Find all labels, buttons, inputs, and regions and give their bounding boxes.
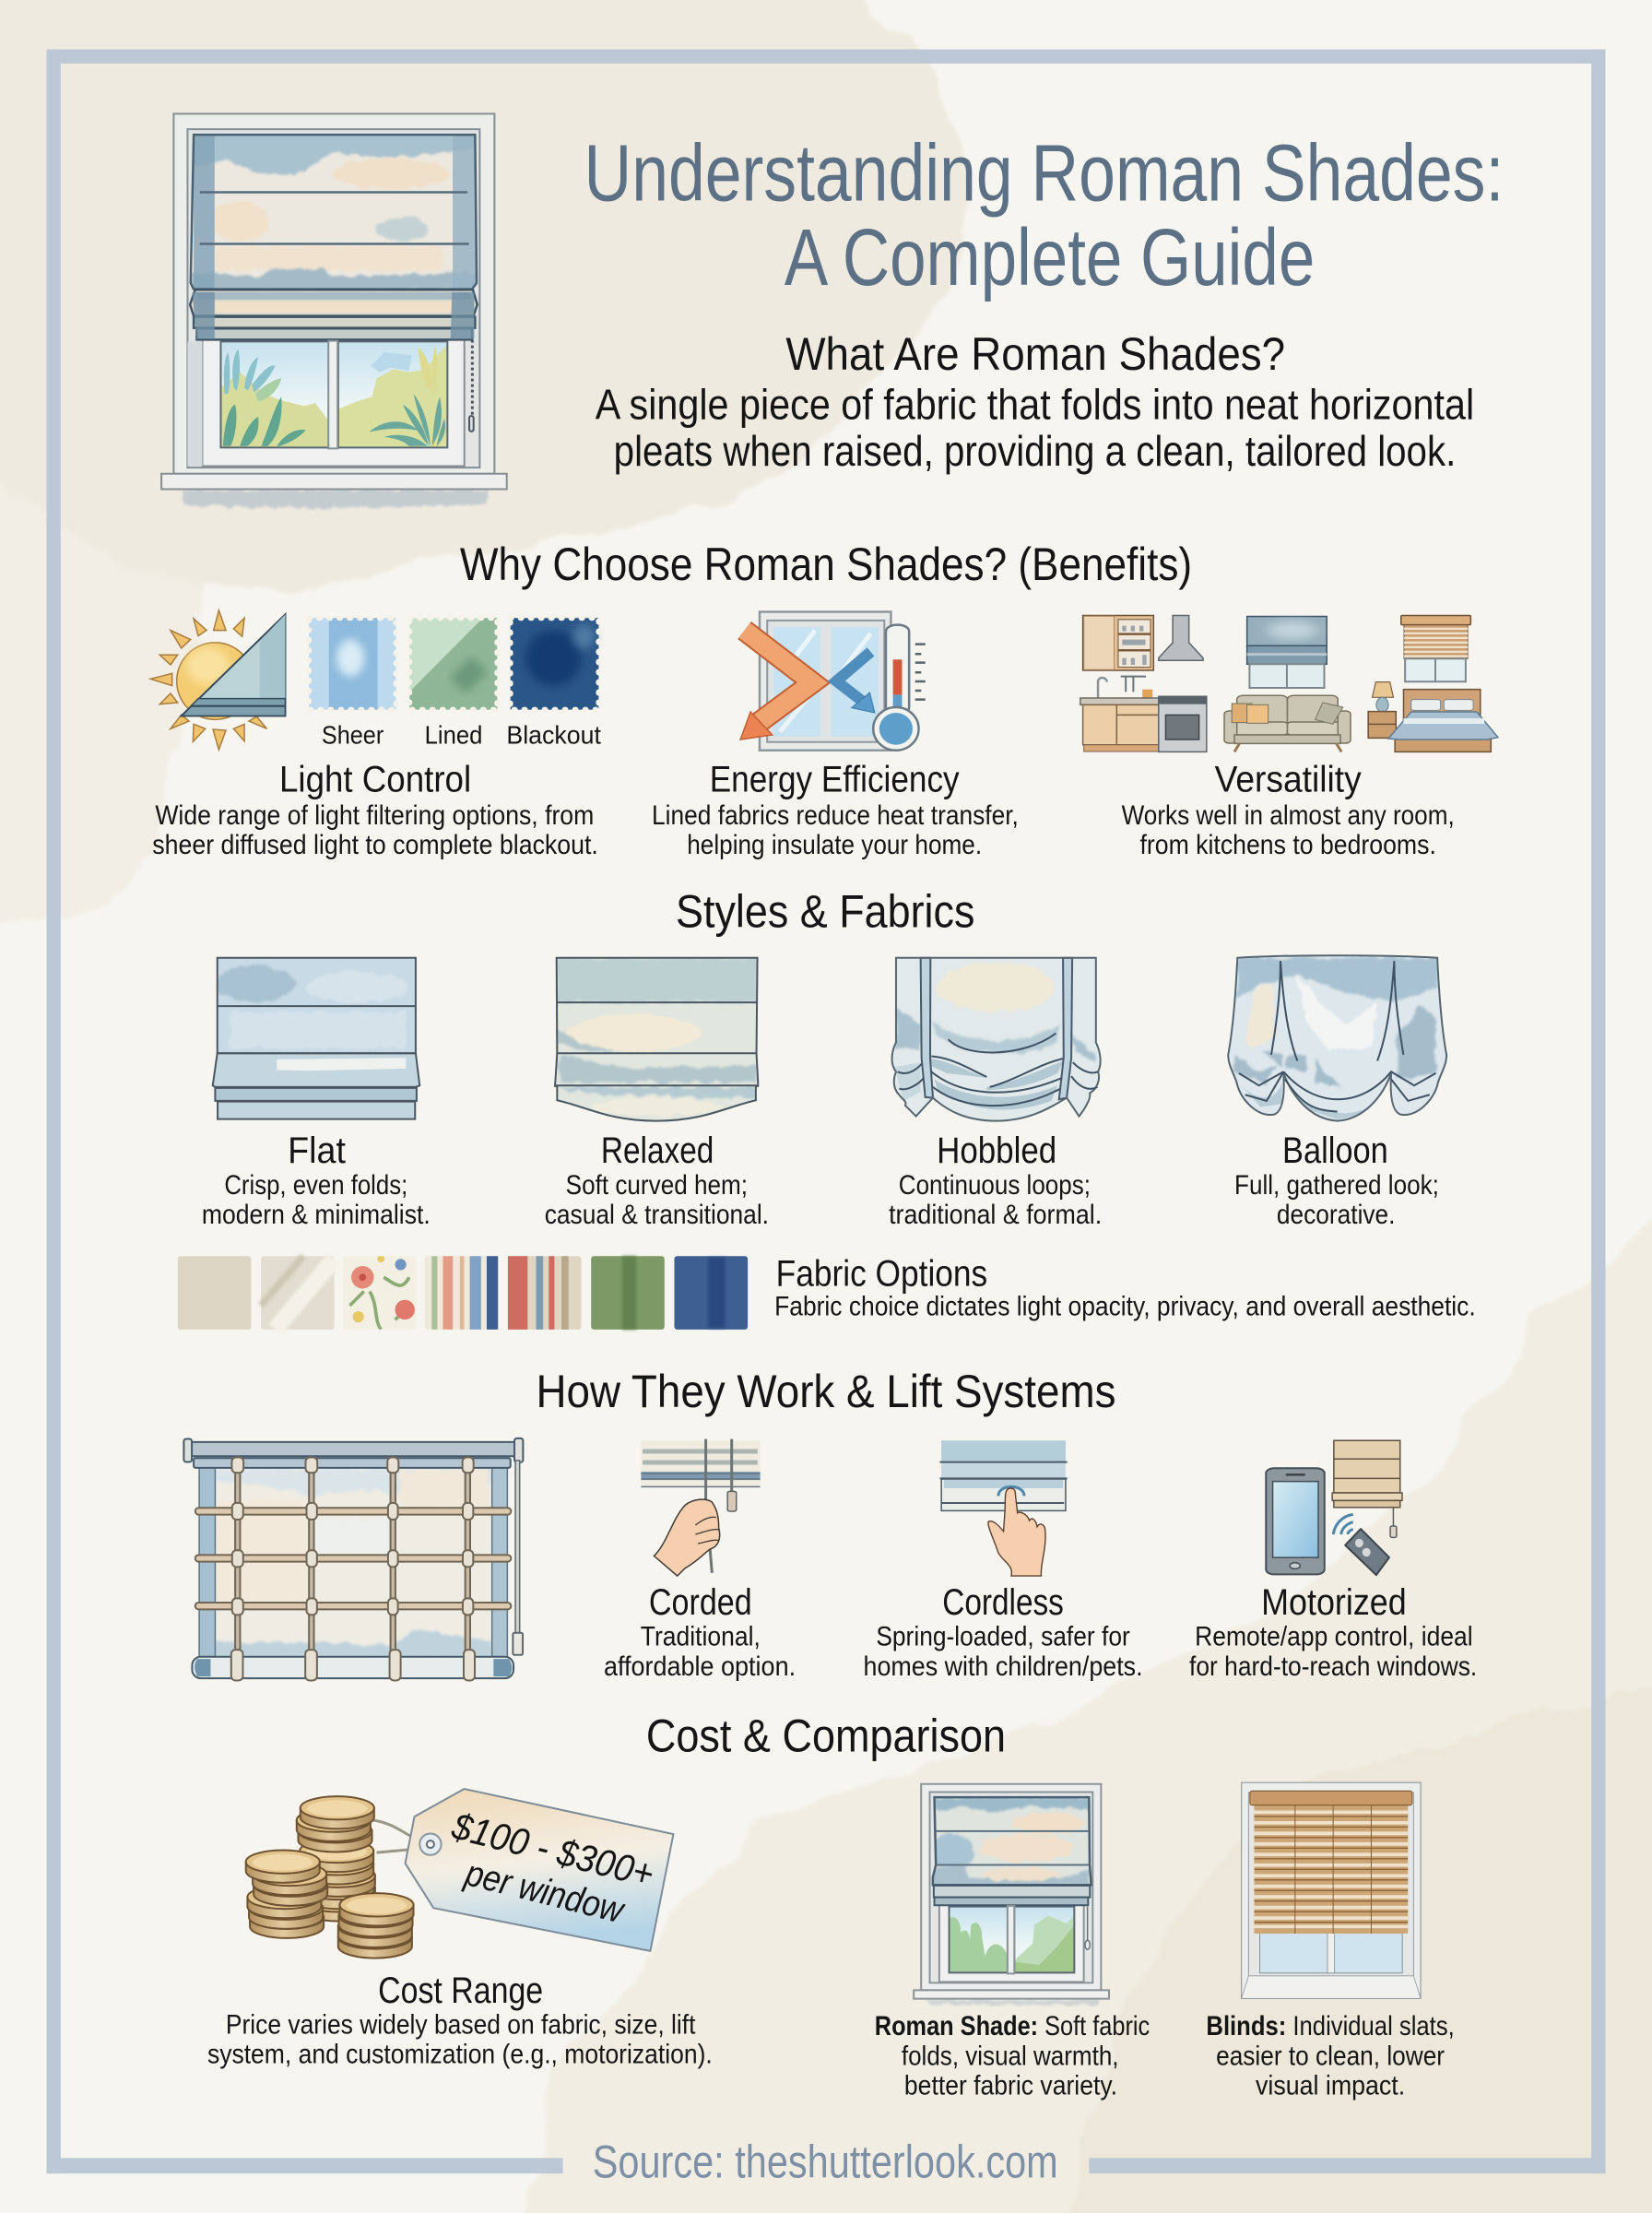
panel: hobbled style — [889, 956, 1105, 1230]
panel: energy efficiency: Energy Efficiency — [710, 760, 960, 800]
swatch: linen — [178, 1256, 251, 1330]
icon: sun with shade — [150, 610, 285, 750]
panel: relaxed style — [545, 956, 769, 1230]
icon: front coin stack — [338, 1893, 414, 1959]
room icons — [1080, 616, 1498, 751]
swatch: blackout — [511, 618, 598, 710]
swatch: natural weave — [261, 1256, 335, 1330]
panel: cost range: system, and customization (e.g., motorization). — [207, 2040, 713, 2070]
panel: relaxed style: Relaxed — [601, 1130, 714, 1171]
panel: roman shade comparison: folds, visual warmth, — [902, 2041, 1119, 2071]
pull chain — [471, 340, 474, 421]
panel: corded — [604, 1439, 796, 1682]
panel: relaxed style: casual & transitional. — [545, 1200, 769, 1230]
section heading: lift systems: How They Work & Lift Systems — [537, 1365, 1115, 1417]
panel: flat style: modern & minimalist. — [202, 1200, 431, 1230]
view through right pane — [338, 341, 447, 447]
panel: blinds comparison: Blinds: Individual slats, — [1206, 2011, 1455, 2041]
panel: energy efficiency — [652, 612, 1019, 860]
shade pleats — [190, 290, 478, 316]
panel: balloon style: Full, gathered look; — [1234, 1170, 1439, 1201]
fabric options text: Fabric Options — [776, 1253, 987, 1294]
lift cords — [235, 1461, 470, 1675]
price tag text: per window — [461, 1852, 629, 1932]
title: A Complete Guide — [785, 213, 1315, 302]
panel: cost range: Cost Range — [378, 1970, 543, 2011]
view through right pane — [1014, 1907, 1074, 1972]
panel: cost range: Price varies widely based on fabric, size, lift — [226, 2010, 696, 2041]
tag string — [373, 1820, 428, 1852]
panel: balloon style: decorative. — [1277, 1200, 1395, 1230]
panel: flat style: Flat — [288, 1130, 346, 1171]
window sill — [161, 474, 507, 489]
swatch labels: Blackout — [506, 721, 601, 750]
shade: flat — [213, 956, 419, 1119]
fabric shade — [190, 132, 479, 339]
intro text: pleats when raised, providing a clean, tailored look. — [614, 427, 1456, 475]
price tag text: $100 - $300+ — [447, 1805, 658, 1896]
panel: light control: sheer diffused light to complete blackout. — [152, 830, 598, 860]
shade: balloon — [1227, 954, 1448, 1124]
bottom bar — [192, 1657, 513, 1678]
swatch labels: Sheer — [322, 721, 384, 750]
fabric options text: Fabric choice dictates light opacity, privacy, and overall aesthetic. — [774, 1292, 1476, 1322]
title — [584, 128, 1504, 302]
view through left pane — [220, 341, 329, 447]
swatch: sheer — [309, 618, 396, 710]
swatch labels: Lined — [425, 721, 482, 750]
section heading: cost: Cost & Comparison — [646, 1709, 1006, 1761]
panel: roman shade comparison: Roman Shade: Soft fabric — [875, 2011, 1150, 2041]
intro text: A single piece of fabric that folds into neat horizontal — [596, 381, 1474, 429]
shade: hobbled — [890, 956, 1105, 1122]
icon: cordless lift — [939, 1440, 1068, 1576]
panel: versatility: from kitchens to bedrooms. — [1139, 830, 1436, 860]
panel: balloon style — [1227, 954, 1448, 1230]
panel: roman shade comparison — [875, 1784, 1150, 2101]
price tag shape — [406, 1789, 673, 1951]
intro heading: What Are Roman Shades? — [785, 327, 1285, 380]
icon: phone, remote and shade — [1266, 1440, 1402, 1575]
panel: motorized: Remote/app control, ideal — [1195, 1622, 1473, 1652]
panel: balloon style: Balloon — [1282, 1130, 1388, 1171]
panel: hobbled style: traditional & formal. — [889, 1200, 1102, 1230]
panel: energy efficiency: Lined fabrics reduce heat transfer, — [652, 800, 1019, 831]
section heading: benefits: Why Choose Roman Shades? (Benefits) — [460, 538, 1192, 590]
panel: roman shade comparison: better fabric variety. — [904, 2070, 1117, 2101]
panel: cordless: homes with children/pets. — [864, 1651, 1143, 1682]
panel: cordless — [864, 1440, 1143, 1682]
panel: blinds comparison: easier to clean, lower — [1216, 2041, 1445, 2071]
icon: living room — [1224, 617, 1351, 751]
illustration: coins and tag — [246, 1789, 673, 1959]
panel: light control: Wide range of light filtering options, from — [155, 800, 594, 831]
window with roman shade — [914, 1784, 1109, 2005]
panel: motorized: Motorized — [1261, 1582, 1407, 1623]
swatch: green — [591, 1256, 665, 1330]
hero illustration: window with roman shade — [161, 113, 507, 508]
swatch: pastel stripes — [425, 1256, 498, 1330]
swatch: navy — [674, 1256, 748, 1330]
icon: bedroom — [1368, 616, 1498, 751]
source line: Source: theshutterlook.com — [593, 2136, 1058, 2188]
panel: flat style: Crisp, even folds; — [224, 1170, 407, 1201]
panel: energy efficiency: helping insulate your home. — [687, 830, 982, 860]
panel: corded: Traditional, — [641, 1622, 761, 1652]
panel: cordless: Cordless — [942, 1582, 1064, 1623]
swatch: lined — [409, 618, 497, 710]
section heading: styles: Styles & Fabrics — [676, 885, 974, 938]
icon: back coin stack — [297, 1796, 375, 1922]
top headrail — [183, 1438, 523, 1468]
icon: window, arrows and thermometer — [740, 612, 926, 751]
panel: versatility: Works well in almost any room, — [1122, 800, 1455, 831]
swatch labels — [322, 721, 601, 750]
panel: cost range — [207, 1789, 713, 2070]
panel: versatility — [1080, 616, 1498, 860]
light control icons — [150, 610, 598, 750]
panel: blinds comparison: visual impact. — [1256, 2070, 1405, 2101]
icon: corded lift — [641, 1439, 761, 1576]
pull cord and tassel — [513, 1461, 523, 1655]
intro text — [596, 381, 1474, 475]
fabric options text — [774, 1253, 1476, 1322]
horizontal dowels — [195, 1508, 511, 1609]
window with wooden blinds — [1242, 1782, 1421, 1998]
panel: relaxed style: Soft curved hem; — [566, 1170, 748, 1201]
cord rings — [231, 1458, 475, 1680]
panel: flat style — [202, 956, 431, 1230]
panel: blinds comparison — [1206, 1782, 1455, 2101]
panel: light control: Light Control — [279, 760, 471, 800]
diagram: inner workings of a shade — [183, 1438, 523, 1680]
panel: motorized — [1189, 1440, 1477, 1682]
panel: versatility: Versatility — [1215, 760, 1362, 800]
panel: hobbled style: Hobbled — [937, 1130, 1056, 1171]
panel: motorized: for hard-to-reach windows. — [1189, 1651, 1477, 1682]
panel: hobbled style: Continuous loops; — [899, 1170, 1091, 1201]
icon: kitchen — [1080, 616, 1207, 751]
view through left pane — [950, 1907, 1008, 1972]
panel: corded: Corded — [649, 1582, 752, 1623]
panel: cordless: Spring-loaded, safer for — [876, 1622, 1130, 1652]
panel: corded: affordable option. — [604, 1651, 796, 1682]
shade: relaxed — [553, 956, 760, 1122]
swatch: floral — [343, 1255, 416, 1330]
fabric swatches — [178, 1255, 748, 1330]
icon: left coin stack — [246, 1850, 327, 1938]
window sill — [914, 1990, 1109, 1999]
swatch: red stripes — [508, 1256, 581, 1330]
panel: light control — [150, 610, 601, 860]
